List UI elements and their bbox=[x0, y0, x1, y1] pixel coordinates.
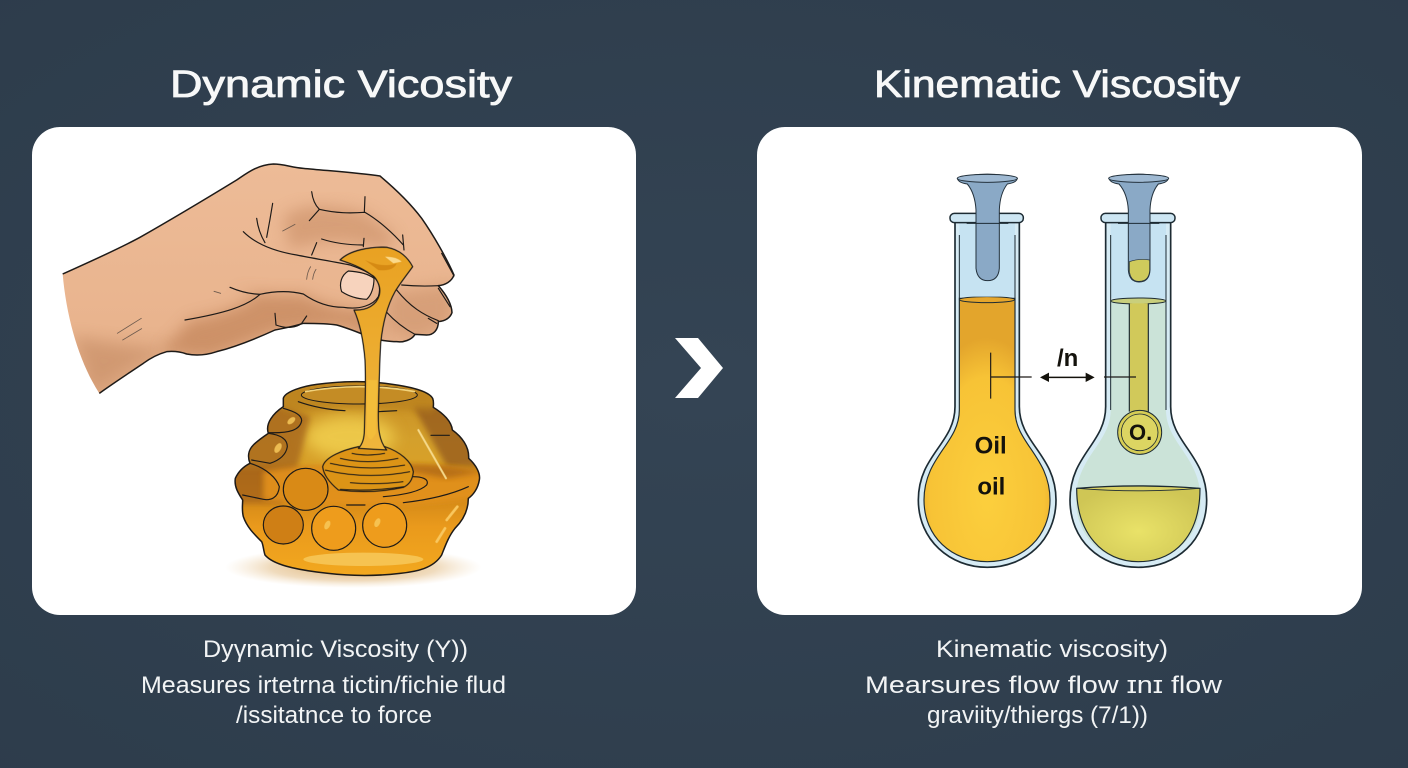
honeycomb cells bbox=[263, 468, 407, 550]
illustration: two flasks bbox=[918, 174, 1207, 567]
bulb bbox=[1118, 410, 1162, 454]
label: oil: oil bbox=[977, 474, 1005, 501]
funnel stopper bbox=[1109, 174, 1168, 282]
label: O.: O. bbox=[1129, 420, 1152, 445]
rim bbox=[301, 386, 417, 404]
flask: second liquid bbox=[1070, 174, 1207, 567]
heading: kinematic viscosity: Kinematic Viscosity bbox=[874, 64, 1240, 106]
label: /n: /n bbox=[1057, 345, 1078, 372]
icon: hand bbox=[63, 164, 454, 393]
illustration: hand and honey jar bbox=[63, 164, 483, 588]
funnel stopper bbox=[957, 174, 1017, 281]
text block: dynamic viscosity description bbox=[141, 636, 506, 729]
label: Oil: Oil bbox=[975, 432, 1007, 459]
measure tick bbox=[991, 353, 1032, 399]
panel: dynamic viscosity card bbox=[32, 127, 636, 615]
arrow: double-headed measure bbox=[1040, 373, 1095, 382]
flask: oil bbox=[918, 174, 1056, 567]
text block: kinematic viscosity description: graviity/thiergs (7/1)) bbox=[927, 702, 1148, 729]
text block: kinematic viscosity description: Mearsures flow flow ɪnɪ flow bbox=[865, 672, 1223, 699]
dollop spiral bbox=[323, 447, 413, 491]
jar shadow bbox=[225, 547, 482, 588]
capillary tube bbox=[1129, 303, 1148, 412]
arrow: chevron between panels bbox=[675, 338, 723, 398]
heading: dynamic viscosity: Dynamic Vicosity bbox=[170, 64, 512, 106]
text block: dynamic viscosity description: Dyγnamic Viscosity (Y)) bbox=[203, 636, 468, 663]
text block: dynamic viscosity description: Measures irtetrna tictin/fichie flud bbox=[141, 672, 506, 699]
text block: dynamic viscosity description: /issitatnce to force bbox=[236, 702, 432, 729]
honey drip bbox=[340, 247, 413, 450]
text block: kinematic viscosity description: Kinematic viscosity) bbox=[936, 636, 1168, 663]
thumb nail bbox=[340, 271, 374, 299]
text block: kinematic viscosity description bbox=[865, 636, 1223, 729]
icon: honey jar bbox=[230, 382, 483, 575]
panel: kinematic viscosity card bbox=[757, 127, 1362, 615]
